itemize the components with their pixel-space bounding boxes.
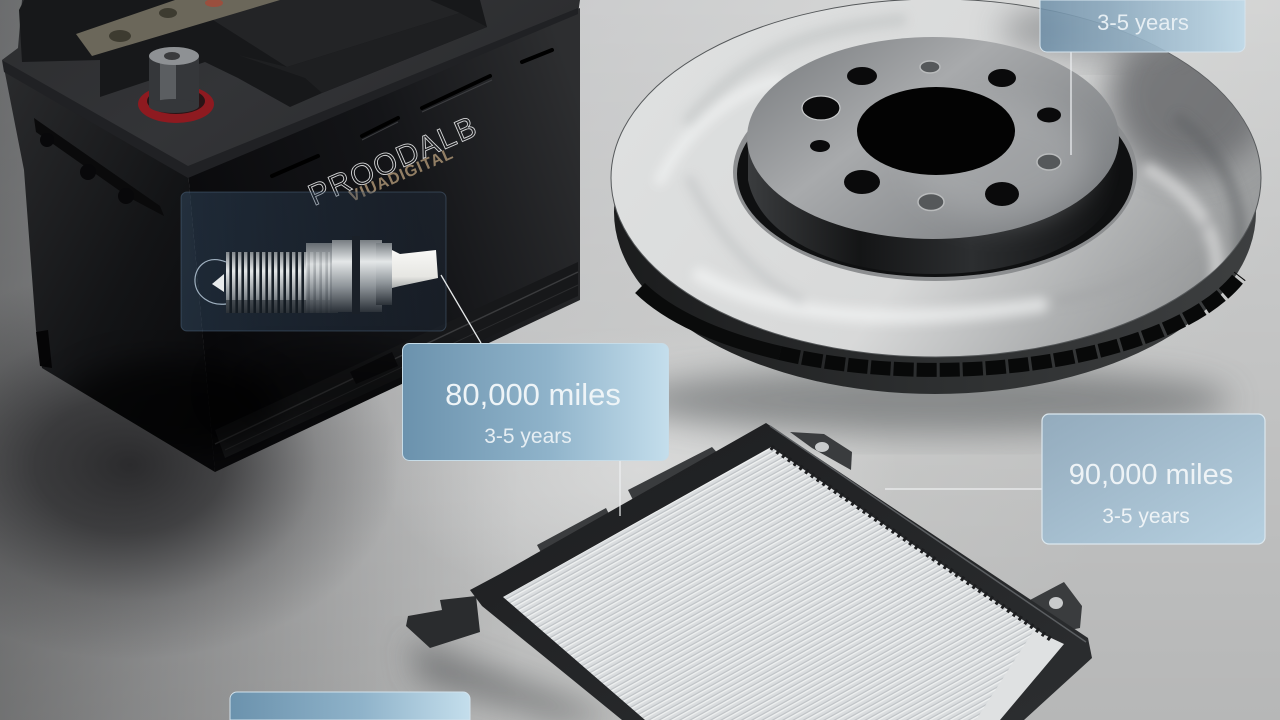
filter media end strip	[976, 630, 1064, 720]
battery ridges	[272, 50, 552, 176]
hub recess	[733, 63, 1137, 281]
battery positive terminal	[138, 47, 214, 123]
battery foot	[36, 330, 52, 368]
spark plug body	[306, 243, 338, 313]
rotor friction face	[611, 0, 1261, 357]
battery right face	[188, 8, 580, 472]
rotor vent slots	[780, 276, 1240, 370]
battery left face	[4, 68, 215, 472]
battery raised cover	[19, 0, 487, 107]
battery bottom ledge	[215, 262, 578, 458]
hub top face	[747, 37, 1119, 239]
right callout leader line	[885, 488, 1042, 490]
hub centre bore	[857, 87, 1015, 175]
top callout leader line	[1070, 52, 1072, 155]
spark plug ceramic	[392, 250, 438, 288]
filter callout leader line	[619, 460, 621, 516]
battery brand subtext: VIUADIGITAL	[347, 145, 456, 206]
rotor vent slots dark	[640, 288, 780, 353]
hub bolt holes	[802, 67, 1061, 206]
battery top lid	[2, 0, 580, 172]
middle callout years: 3-5 years	[484, 425, 572, 448]
right callout mileage: 90,000 miles	[1069, 459, 1233, 491]
spark plug inset	[181, 192, 481, 343]
cabin air filter	[406, 423, 1092, 720]
filter pleated media	[503, 447, 1052, 720]
hub wall	[748, 140, 1120, 274]
top callout	[1040, 0, 1245, 52]
rotor brushed streaks	[660, 2, 1270, 316]
shadow: rotor and filter	[410, 366, 1230, 720]
middle callout	[402, 344, 668, 460]
filter frame	[470, 423, 1092, 720]
top callout years: 3-5 years	[1097, 10, 1189, 35]
spark plug tip	[195, 260, 226, 304]
hub small studs	[918, 61, 1061, 210]
inset panel	[181, 192, 446, 331]
battery lower darkening	[76, 354, 402, 454]
battery label plate	[76, 0, 280, 56]
filter tabs	[790, 432, 852, 470]
spark plug thread	[226, 252, 330, 313]
rotor edge	[614, 30, 1256, 394]
battery	[2, 0, 580, 472]
battery brand text: PROODALB	[304, 110, 483, 212]
bottom callout	[230, 692, 470, 720]
battery side handle	[34, 118, 164, 216]
middle callout mileage: 80,000 miles	[445, 377, 621, 412]
right callout	[1042, 414, 1265, 544]
leader line to callout	[441, 275, 481, 343]
right callout years: 3-5 years	[1102, 505, 1190, 528]
filter media toothed edge	[771, 447, 1052, 640]
brake rotor	[611, 0, 1270, 394]
